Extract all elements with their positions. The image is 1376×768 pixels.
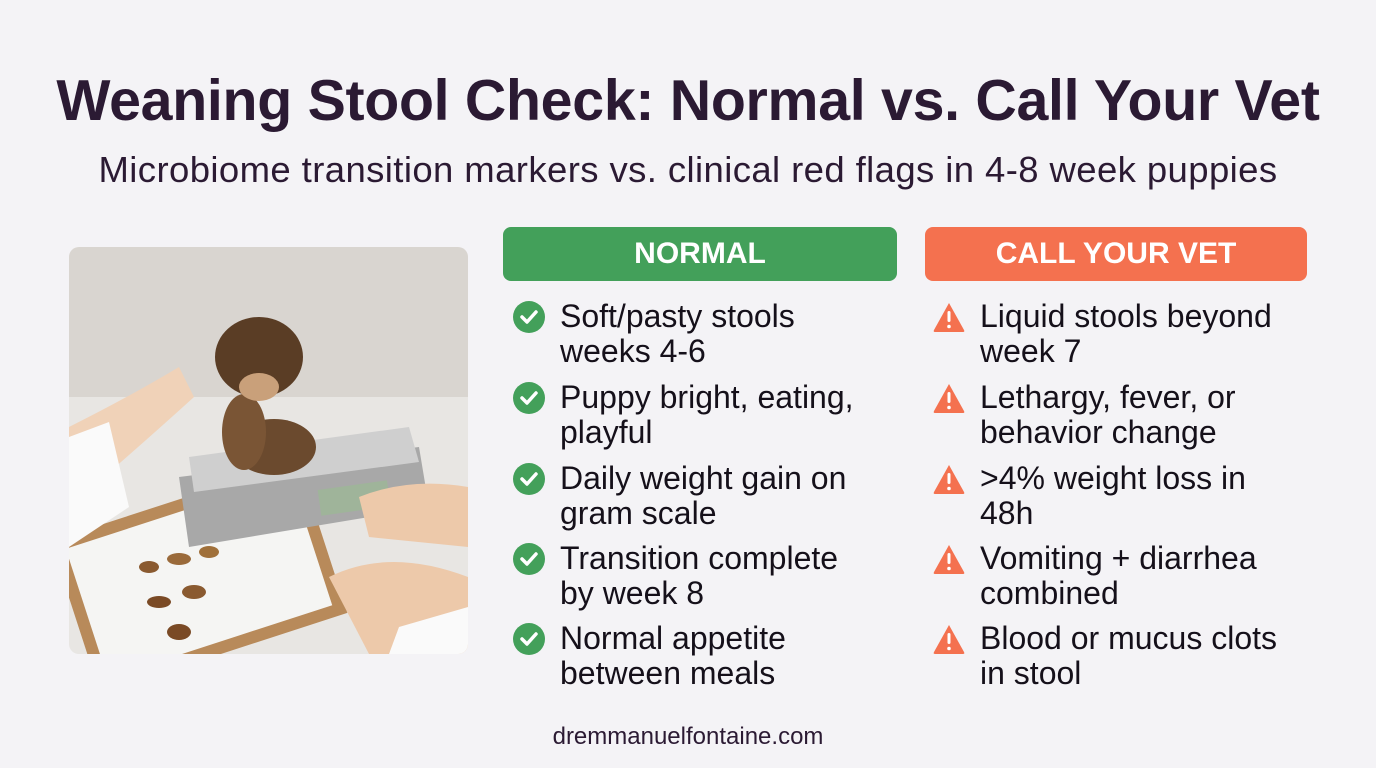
item vet 5: in stool	[980, 655, 1081, 691]
footer url: dremmanuelfontaine.com	[553, 723, 823, 750]
list: call your vet	[934, 298, 1277, 691]
item vet 3	[934, 460, 1246, 531]
item vet 5	[934, 620, 1277, 691]
header: normal	[503, 227, 897, 281]
item normal 2	[513, 379, 854, 450]
title: Weaning Stool Check: Normal vs. Call Your Vet	[56, 69, 1320, 133]
photo: puppy on scale	[69, 247, 468, 654]
item normal 2: Puppy bright, eating,	[560, 379, 854, 415]
item vet 1: Liquid stools beyond	[980, 298, 1272, 334]
item vet 1	[934, 298, 1272, 369]
item vet 4: Vomiting + diarrhea	[980, 540, 1257, 576]
header: call your vet	[925, 227, 1307, 281]
item vet 4: combined	[980, 575, 1119, 611]
item normal 2: playful	[560, 414, 652, 450]
item normal 5	[513, 620, 786, 691]
item vet 5: Blood or mucus clots	[980, 620, 1277, 656]
header: normal: NORMAL	[634, 237, 766, 270]
item vet 3: 48h	[980, 495, 1033, 531]
item vet 4	[934, 540, 1257, 611]
item normal 1	[513, 298, 795, 369]
item normal 3	[513, 460, 846, 531]
item vet 3: >4% weight loss in	[980, 460, 1246, 496]
item normal 3: gram scale	[560, 495, 716, 531]
item vet 1: week 7	[980, 333, 1081, 369]
item vet 2	[934, 379, 1236, 450]
item normal 3: Daily weight gain on	[560, 460, 846, 496]
item normal 1: Soft/pasty stools	[560, 298, 795, 334]
list: normal	[513, 298, 854, 691]
item normal 4: by week 8	[560, 575, 704, 611]
header: call your vet: CALL YOUR VET	[996, 237, 1236, 270]
item normal 5: Normal appetite	[560, 620, 786, 656]
item normal 4: Transition complete	[560, 540, 838, 576]
item normal 1: weeks 4-6	[560, 333, 706, 369]
item normal 5: between meals	[560, 655, 775, 691]
item vet 2: Lethargy, fever, or	[980, 379, 1236, 415]
subtitle: Microbiome transition markers vs. clinical red flags in 4-8 week puppies	[98, 149, 1278, 190]
item vet 2: behavior change	[980, 414, 1217, 450]
item normal 4	[513, 540, 838, 611]
